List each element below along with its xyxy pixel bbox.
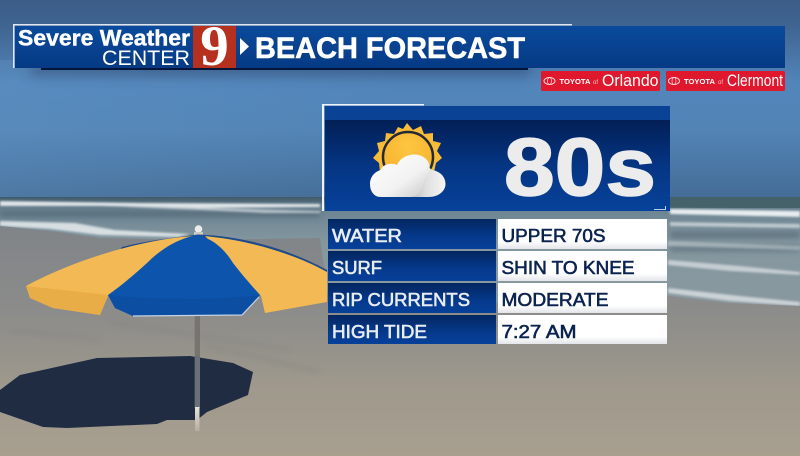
brand: Severe Weather Center xyxy=(18,26,190,70)
yellow left panel xyxy=(26,236,194,315)
channel 9 logo: 9 xyxy=(200,15,229,78)
row: surf xyxy=(328,251,667,281)
sponsor badges xyxy=(541,71,785,91)
sun rays xyxy=(373,123,442,172)
panel frame xyxy=(322,104,424,211)
brand: Severe Weather Center: Severe Weather xyxy=(18,26,190,50)
row: water xyxy=(328,219,667,249)
corner tick xyxy=(654,206,666,210)
badge: Toyota of Orlando: TOYOTA xyxy=(560,79,590,86)
row: high tide: HIGH TIDE xyxy=(332,322,427,342)
badge: Toyota of Clermont: TOYOTA xyxy=(684,79,715,86)
brand: Severe Weather Center: CENTER xyxy=(102,46,190,70)
badge: Toyota of Orlando: of xyxy=(593,80,598,86)
badge: Toyota of Clermont: of xyxy=(718,80,723,86)
panel: temperature xyxy=(322,104,670,213)
cloud xyxy=(370,155,446,197)
row: rip currents: MODERATE xyxy=(502,290,608,310)
row: surf: SHIN TO KNEE xyxy=(502,258,634,278)
badge: Toyota of Orlando xyxy=(541,71,660,91)
temperature value: 80s xyxy=(504,122,656,213)
umbrella canopy xyxy=(26,225,327,316)
badge: Toyota of Orlando: Orlando xyxy=(602,72,658,90)
blue centre panel xyxy=(108,235,260,316)
sun disc xyxy=(383,132,433,182)
banner title: BEACH FORECAST xyxy=(255,32,525,65)
row: high tide: 7:27 AM xyxy=(502,322,576,342)
ocean xyxy=(0,197,800,327)
banner underline xyxy=(41,68,528,70)
row: high tide xyxy=(328,315,667,344)
row: water: WATER xyxy=(332,226,402,246)
back canopy edge xyxy=(120,234,327,280)
sand xyxy=(0,226,800,456)
panel top band xyxy=(325,106,670,120)
header banner xyxy=(13,15,785,78)
sky xyxy=(0,0,800,198)
banner frame xyxy=(13,24,572,68)
row: rip currents: RIP CURRENTS xyxy=(332,290,470,310)
panel body xyxy=(325,120,670,211)
badge: Toyota of Clermont: Clermont xyxy=(727,72,783,90)
channel 9 logo xyxy=(193,15,236,78)
umbrella pole xyxy=(195,316,200,431)
row: water: UPPER 70S xyxy=(502,226,606,246)
icon: partly cloudy xyxy=(370,123,446,197)
arrow xyxy=(240,38,249,55)
row: rip currents xyxy=(328,283,667,313)
banner bar xyxy=(15,26,785,68)
row: surf: SURF xyxy=(332,258,382,278)
umbrella shadow xyxy=(0,356,253,428)
yellow right panel xyxy=(205,236,327,313)
conditions table xyxy=(328,219,667,344)
banner shadow xyxy=(30,62,530,76)
finial xyxy=(194,225,203,236)
badge: Toyota of Clermont xyxy=(666,71,785,91)
yellow left flap xyxy=(26,286,108,315)
